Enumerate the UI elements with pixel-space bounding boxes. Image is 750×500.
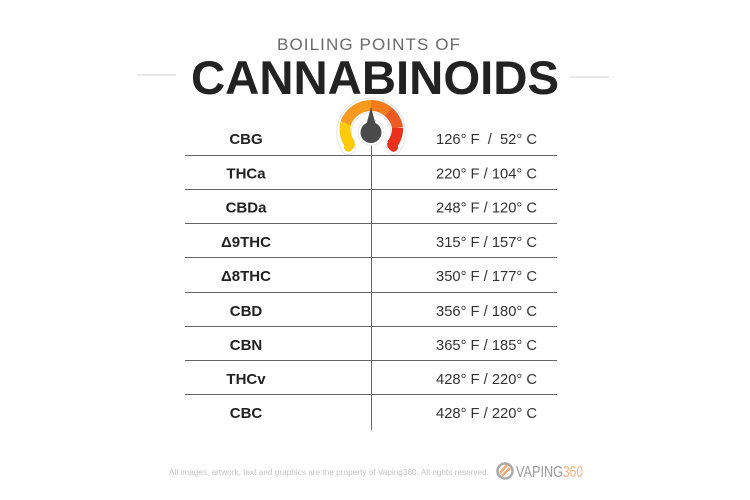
row: Δ9THC: 315° F / 157° C <box>436 234 537 251</box>
row: CBDa: 248° F / 120° C <box>436 200 537 216</box>
row: CBG: CBG <box>229 131 263 148</box>
row: THCa <box>226 166 537 182</box>
row: CBDa: CBDa <box>226 200 267 216</box>
row: CBG <box>229 131 537 148</box>
row: CBN: CBN <box>230 337 262 354</box>
title side rules <box>137 75 609 77</box>
row: THCa: THCa <box>226 166 266 182</box>
row: CBDa <box>226 200 537 216</box>
title: cannabinoids: CANNABINOIDS <box>191 51 559 104</box>
row: Δ8THC: 350° F / 177° C <box>436 268 537 285</box>
footer copyright: All images, artwork, text and graphics are the property of Vaping360. All rights reserved. <box>169 467 489 477</box>
logo: vaping360: VAPING <box>516 464 563 481</box>
logo: vaping360: 360 <box>563 464 583 481</box>
logo: vaping360 <box>498 464 583 481</box>
row: Δ9THC: Δ9THC <box>221 234 271 251</box>
row: THCv: 428° F / 220° C <box>436 371 537 388</box>
row: THCv: THCv <box>226 371 266 388</box>
row: CBD <box>230 303 537 320</box>
row: CBN <box>230 337 537 354</box>
row: CBG: 126° F / 52° C <box>436 131 537 148</box>
gauge icon <box>344 105 398 147</box>
row: Δ8THC <box>221 268 537 285</box>
heading: boiling points of: BOILING POINTS OF <box>277 35 460 54</box>
row: CBC: 428° F / 220° C <box>436 405 537 422</box>
row: Δ8THC: Δ8THC <box>221 268 271 285</box>
table grid <box>185 140 557 430</box>
row: CBD: 356° F / 180° C <box>436 303 537 320</box>
row: CBD: CBD <box>230 303 262 320</box>
row: CBC: CBC <box>230 405 262 422</box>
row: THCv <box>226 371 537 388</box>
row: CBN: 365° F / 185° C <box>436 337 537 354</box>
row: CBC <box>230 405 537 422</box>
row: THCa: 220° F / 104° C <box>436 166 537 182</box>
row: Δ9THC <box>221 234 537 251</box>
